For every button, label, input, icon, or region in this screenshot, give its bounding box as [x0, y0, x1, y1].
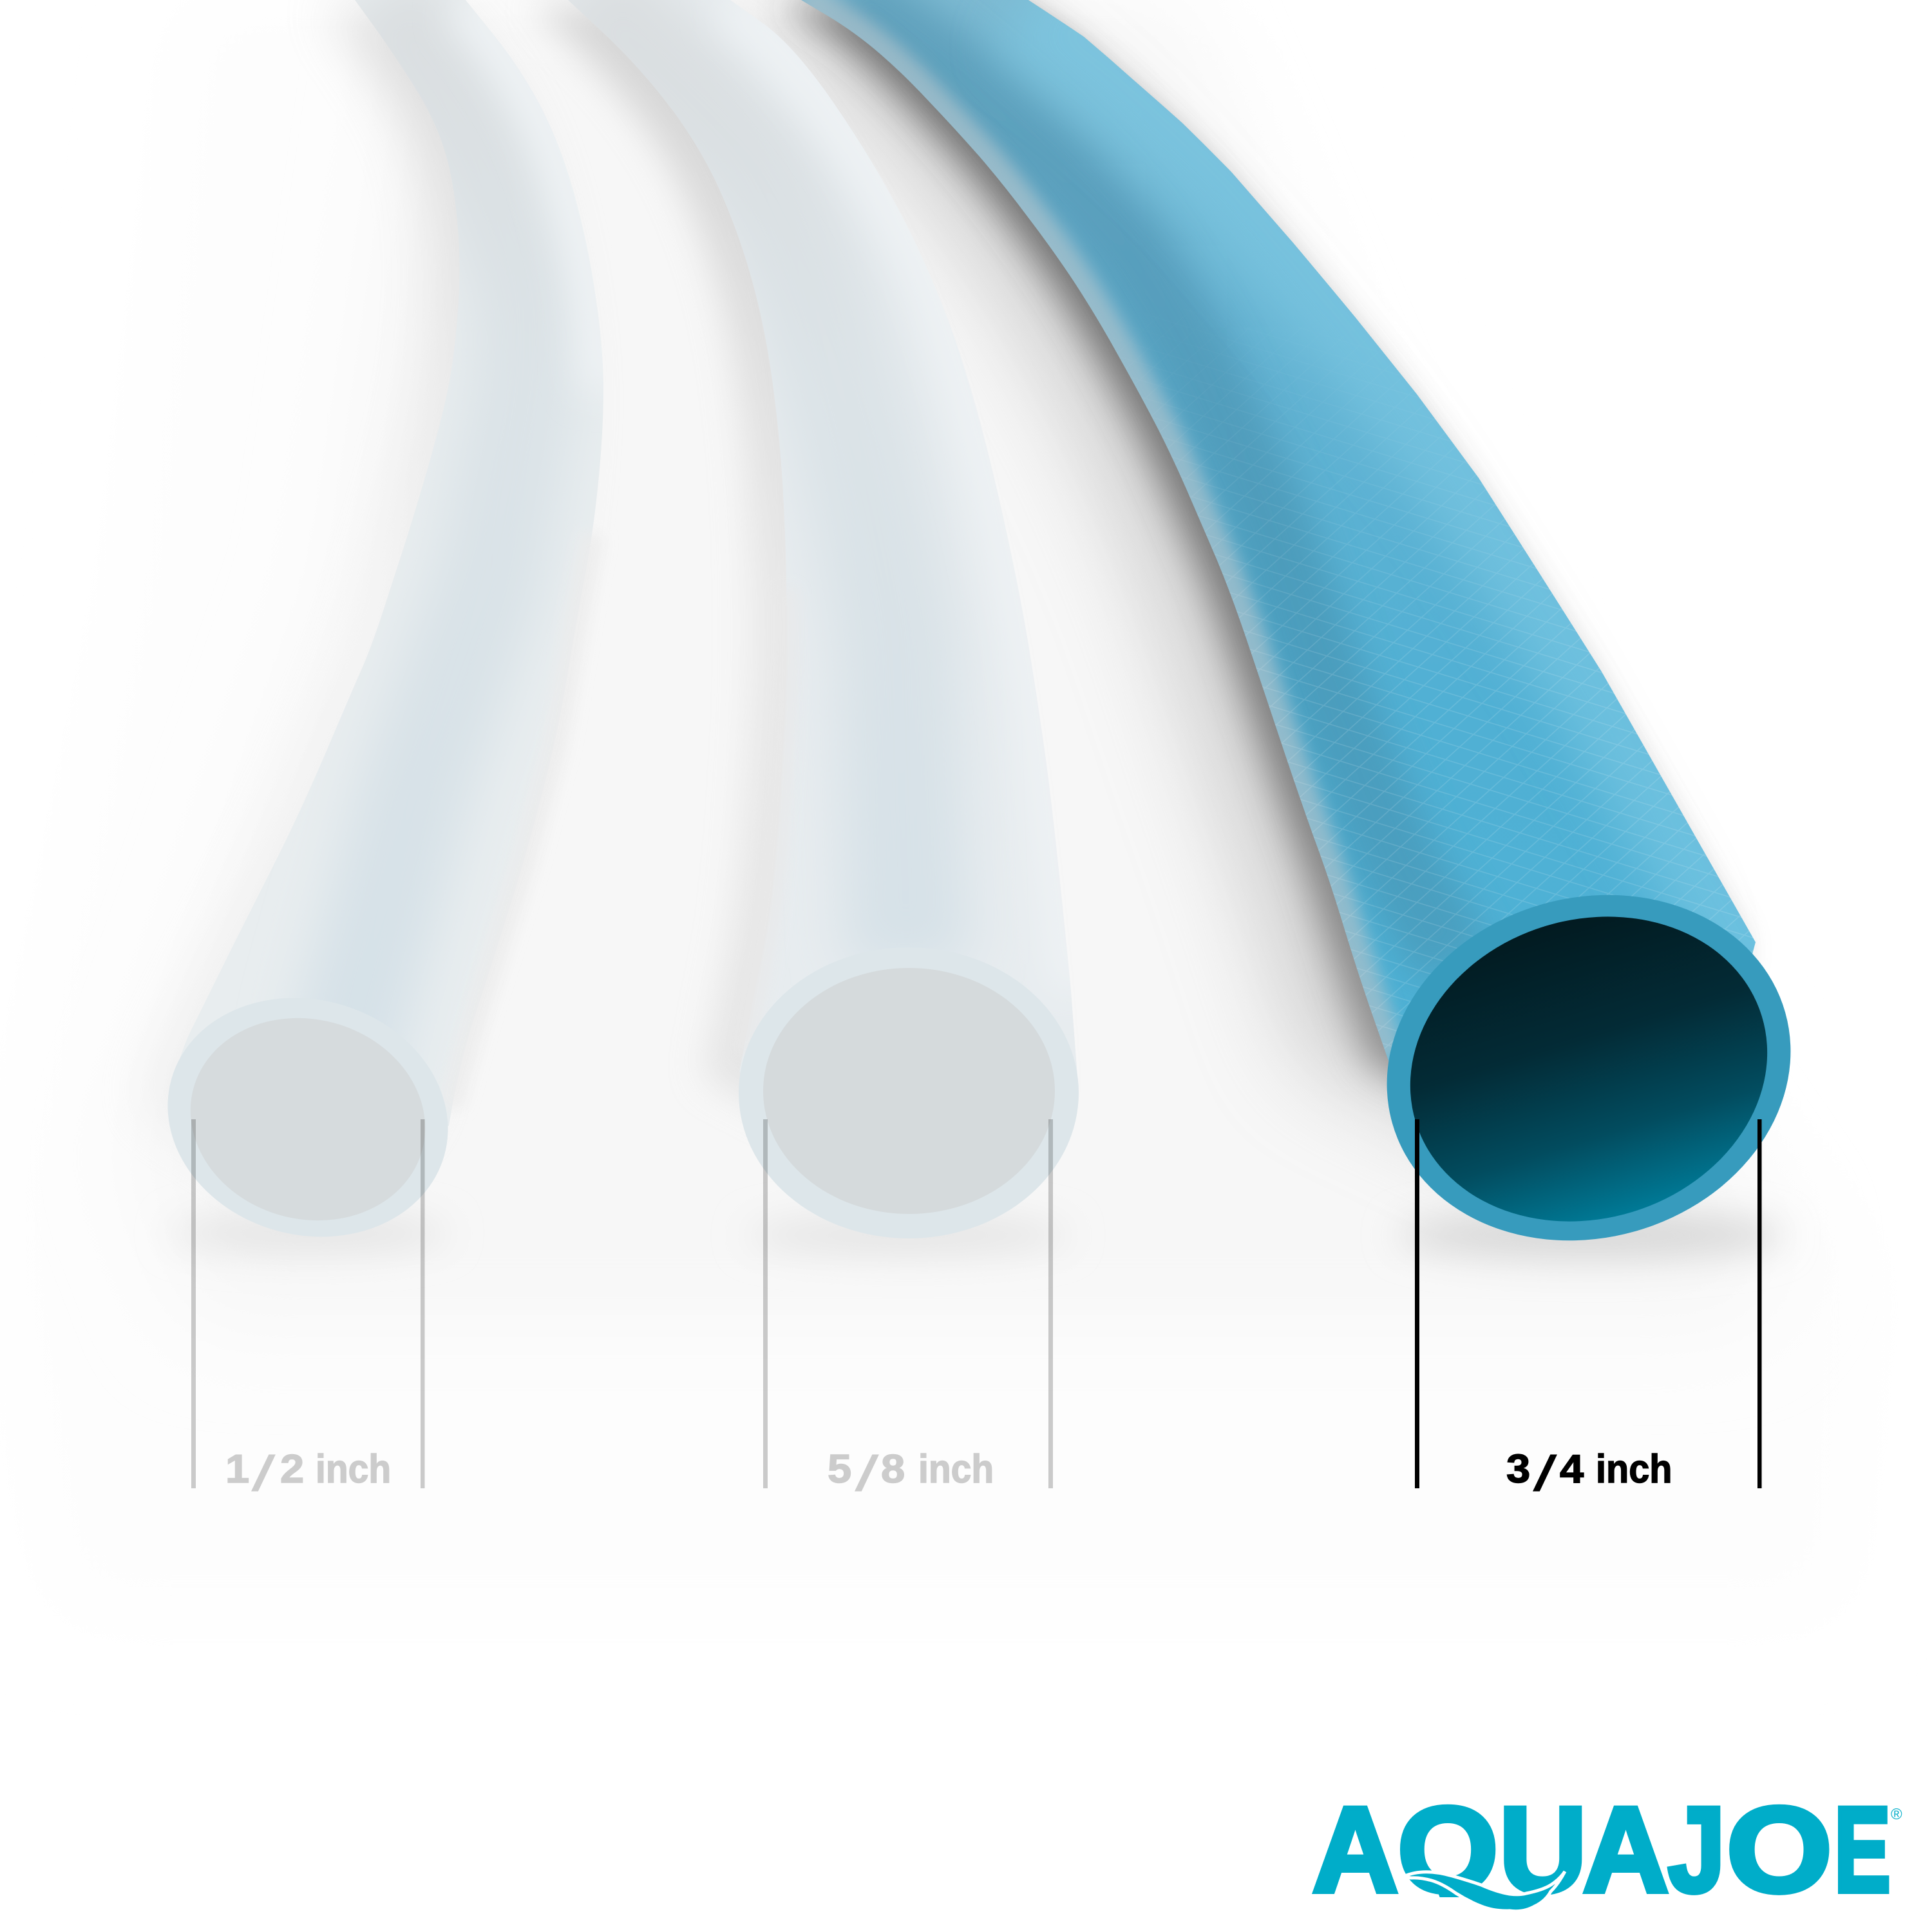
5/8 inch hose end: bore: [763, 968, 1055, 1214]
logo wave: [1403, 1871, 1565, 1911]
1/2 inch measurement: 1: [225, 1446, 249, 1491]
registered mark: ®: [1891, 1806, 1902, 1823]
1/2 inch measurement: [191, 1119, 425, 1502]
3/4 inch hose end: wall: [1346, 849, 1832, 1287]
1/2 inch hose, faded: [140, 0, 603, 1269]
hose weave texture: [1030, 193, 1868, 1159]
5/8 inch measurement: 5: [828, 1446, 851, 1491]
5/8 inch measurement: /: [855, 1445, 879, 1502]
logo: Aqua Joe: [1312, 1782, 1902, 1918]
3/4 inch measurement: /: [1533, 1445, 1557, 1502]
3/4 inch hose, blue: [801, 0, 1868, 1287]
3/4 inch measurement: 3: [1506, 1446, 1530, 1491]
logo: Aqua Joe: Q: [1397, 1783, 1498, 1918]
5/8 inch hose end: wall: [739, 947, 1079, 1238]
logo: Aqua Joe: A: [1312, 1783, 1398, 1917]
1/2 inch measurement: 2: [280, 1446, 304, 1491]
5/8 inch measurement: 8: [881, 1446, 905, 1491]
1/2 inch hose end: wall: [140, 966, 476, 1269]
5/8 inch hose, faded: [568, 0, 1079, 1238]
logo: Aqua Joe: A: [1583, 1783, 1669, 1917]
logo: Aqua Joe: O: [1727, 1782, 1832, 1918]
5/8 inch measurement: inch: [918, 1446, 994, 1492]
3/4 inch measurement: 4: [1560, 1446, 1584, 1491]
3/4 inch measurement: [1415, 1119, 1762, 1502]
logo: Aqua Joe: U: [1499, 1782, 1587, 1917]
3/4 inch hose end: bore: [1372, 873, 1806, 1265]
logo: Aqua Joe: E: [1834, 1783, 1891, 1918]
5/8 inch measurement: [763, 1119, 1053, 1502]
1/2 inch measurement: /: [251, 1445, 276, 1502]
1/2 inch measurement: inch: [316, 1446, 391, 1492]
logo: Aqua Joe: J: [1668, 1782, 1725, 1917]
3/4 inch measurement: inch: [1596, 1446, 1672, 1491]
1/2 inch hose end: bore: [167, 992, 448, 1246]
